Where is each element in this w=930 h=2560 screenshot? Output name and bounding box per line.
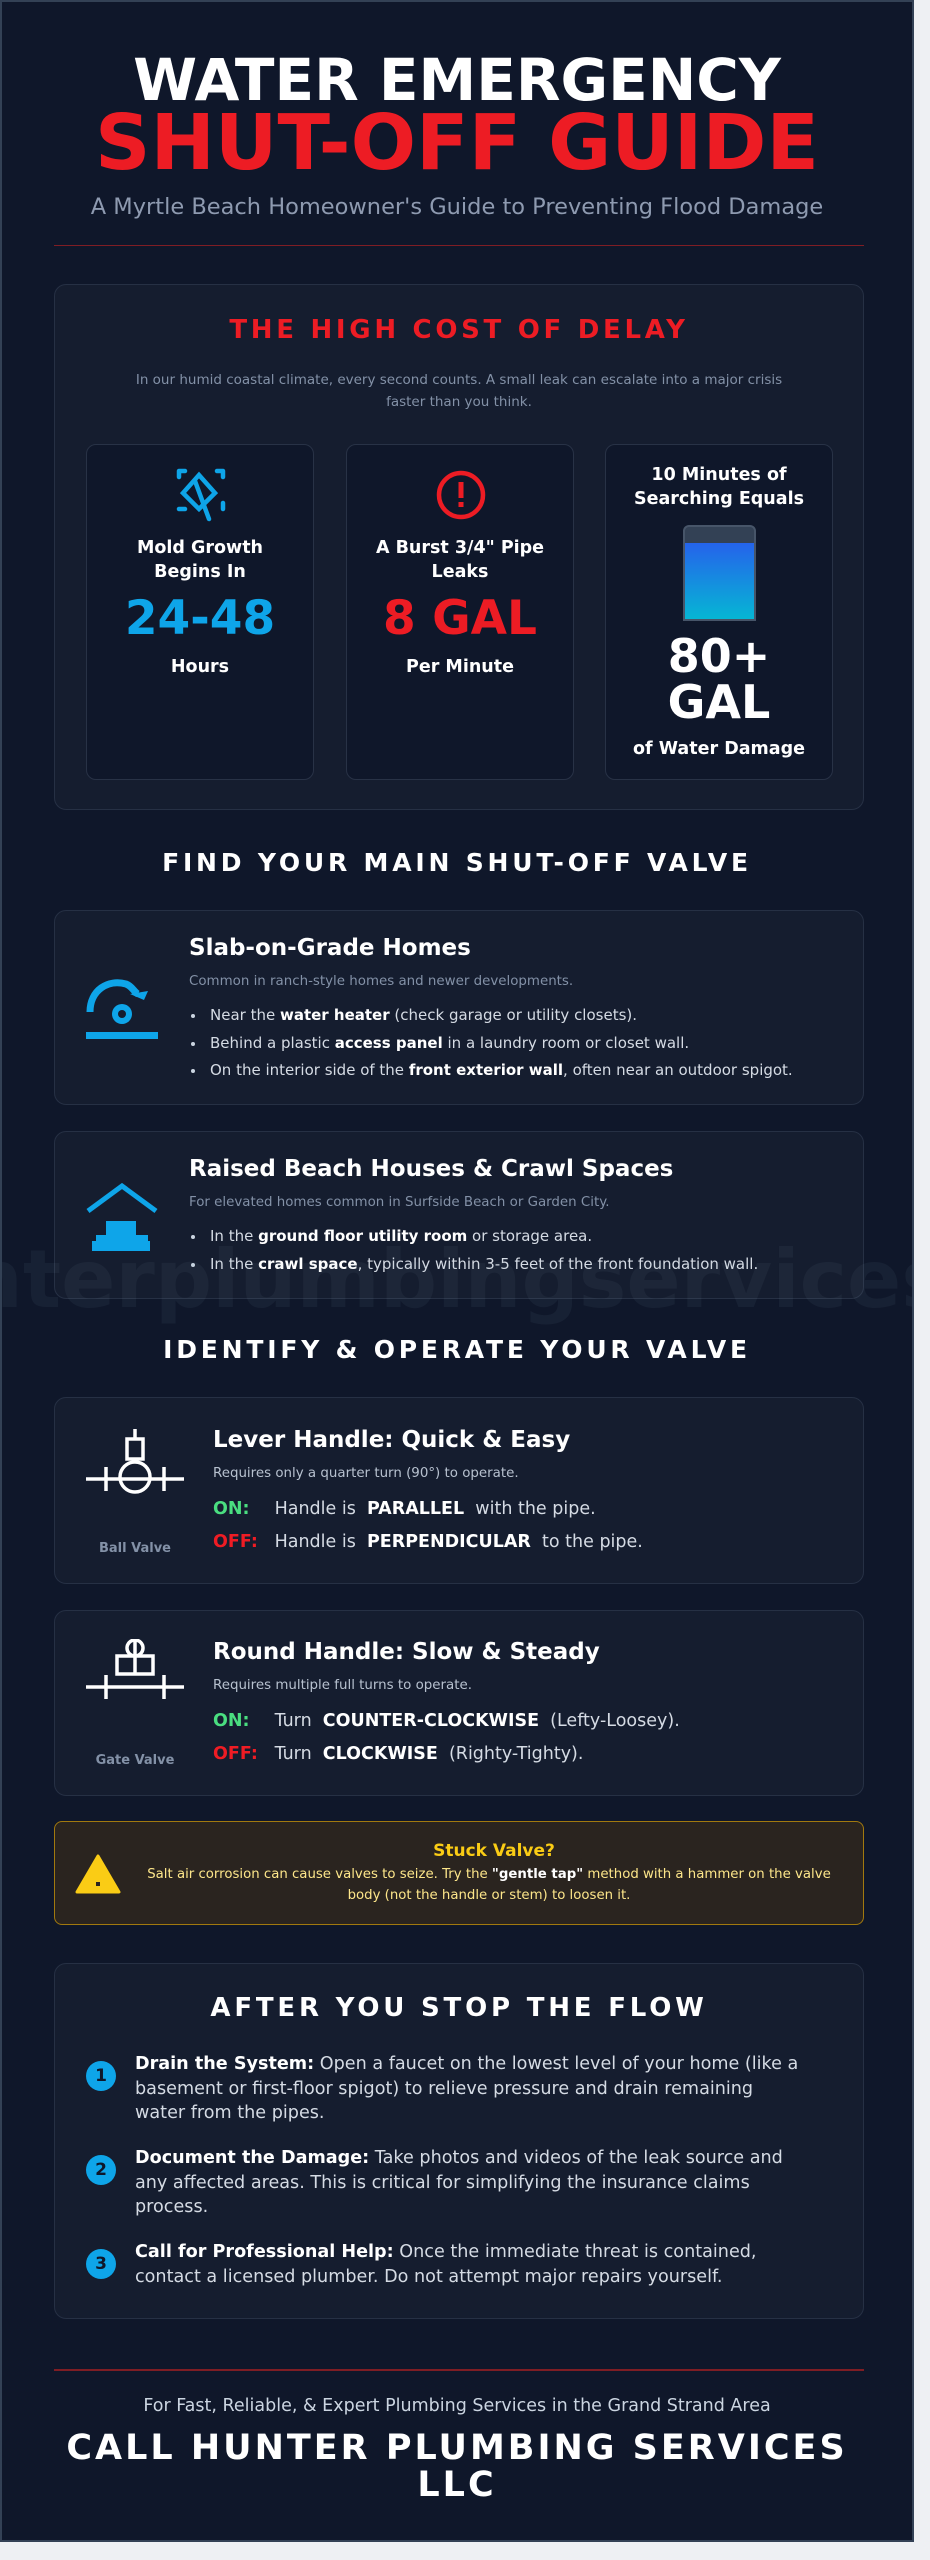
icon: water bucket xyxy=(683,525,756,621)
step 2 xyxy=(86,2148,783,2217)
card: 10 minutes: 10 Minutes of xyxy=(651,465,787,485)
card: burst pipe xyxy=(346,444,574,780)
title: WATER EMERGENCY xyxy=(133,46,781,114)
panel: slab homes: Common in ranch-style homes and newer developments. xyxy=(189,974,573,989)
icon: gate valve xyxy=(86,1639,184,1699)
panel: raised homes: For elevated homes common in Surfside Beach or Garden City. xyxy=(189,1195,610,1210)
panel: after you stop the flow: basement or first-floor spigot) to relieve pressure and drain remaining xyxy=(135,2078,753,2098)
card: burst pipe: Per Minute xyxy=(406,657,514,677)
panel: after you stop the flow: 2 xyxy=(95,2160,107,2180)
card: 10 minutes: of Water Damage xyxy=(633,739,805,759)
panel: raised homes: In the ground floor utility room or storage area. xyxy=(210,1227,592,1245)
panel: after you stop the flow: contact a licensed plumber. Do not attempt major repairs yourself. xyxy=(135,2266,722,2286)
panel: lever handle: ON: xyxy=(213,1499,250,1519)
panel: round handle: OFF: xyxy=(213,1744,258,1764)
callout: stuck valve: Stuck Valve? xyxy=(433,1841,555,1861)
icon: slab xyxy=(86,979,158,1039)
call to action: CALL HUNTER PLUMBING SERVICES LLC xyxy=(66,2428,848,2505)
heading: high cost: THE HIGH COST OF DELAY xyxy=(229,315,689,345)
card: burst pipe: A Burst 3/4" Pipe xyxy=(376,538,544,558)
heading: after: AFTER YOU STOP THE FLOW xyxy=(210,1993,708,2023)
panel: lever handle: Handle is PARALLEL with the pipe. xyxy=(275,1499,596,1519)
step 3: Call for Professional Help: Once the immediate threat is contained, xyxy=(135,2242,757,2262)
icon: ball valve xyxy=(86,1429,184,1494)
icon: raised house xyxy=(86,1183,158,1251)
panel: lever handle: Lever Handle: Quick & Easy xyxy=(213,1427,570,1453)
card: 10 minutes: 80+ xyxy=(668,629,770,683)
card: 10 minutes: Searching Equals xyxy=(634,489,804,509)
panel: round handle: ON: xyxy=(213,1711,250,1731)
title xyxy=(95,46,819,188)
card: burst pipe: Leaks xyxy=(432,562,488,582)
panel: slab homes: Behind a plastic access panel in a laundry room or closet wall. xyxy=(210,1034,689,1052)
callout: stuck valve: body (not the handle or stem) to loosen it. xyxy=(348,1888,630,1903)
icon: alert xyxy=(436,470,486,520)
panel: after you stop the flow: 1 xyxy=(95,2066,107,2086)
heading: identify valve: IDENTIFY & OPERATE YOUR VALVE xyxy=(163,1335,751,1364)
card: mold xyxy=(86,444,314,780)
card: mold: Begins In xyxy=(154,562,246,582)
panel: after you stop the flow: process. xyxy=(135,2197,208,2217)
panel: round handle: Round Handle: Slow & Steady xyxy=(213,1639,600,1665)
step 3 xyxy=(86,2242,757,2286)
heading: find valve: FIND YOUR MAIN SHUT-OFF VALVE xyxy=(162,848,752,877)
title: SHUT-OFF GUIDE xyxy=(95,99,819,188)
step 1 xyxy=(86,2054,798,2123)
panel: after you stop the flow: 3 xyxy=(95,2254,107,2274)
callout: stuck valve xyxy=(54,1821,864,1925)
card: mold: Mold Growth xyxy=(137,538,263,558)
panel: after you stop the flow: water from the pipes. xyxy=(135,2103,325,2123)
panel: round handle xyxy=(54,1610,864,1796)
panel: after you stop the flow xyxy=(54,1963,864,2319)
step 2: Document the Damage: Take photos and videos of the leak source and xyxy=(135,2148,783,2168)
panel: slab homes xyxy=(54,910,864,1105)
card: mold: Hours xyxy=(171,657,229,677)
panel: raised homes xyxy=(54,1131,864,1299)
card: 10 minutes xyxy=(605,444,833,780)
panel: lever handle: Requires only a quarter turn (90°) to operate. xyxy=(213,1466,519,1481)
intro text: In our humid coastal climate, every second counts. A small leak can escalate into a major crisis faster than you think. xyxy=(136,372,782,410)
card: mold: 24-48 xyxy=(125,591,275,646)
icon: mold xyxy=(176,468,226,522)
step 1: Drain the System: Open a faucet on the lowest level of your home (like a xyxy=(135,2054,798,2074)
panel: round handle: Turn COUNTER-CLOCKWISE (Lefty-Loosey). xyxy=(275,1711,680,1731)
icon: warning xyxy=(76,1854,121,1894)
panel: high cost of delay xyxy=(54,284,864,810)
panel: lever handle: Handle is PERPENDICULAR to the pipe. xyxy=(275,1532,643,1552)
footer text: For Fast, Reliable, & Expert Plumbing Services in the Grand Strand Area xyxy=(143,2396,771,2416)
panel: raised homes: Raised Beach Houses & Crawl Spaces xyxy=(189,1156,673,1182)
card: 10 minutes: GAL xyxy=(668,675,770,729)
card: burst pipe: 8 GAL xyxy=(383,591,537,646)
subtitle: A Myrtle Beach Homeowner's Guide to Preventing Flood Damage xyxy=(91,194,823,220)
panel: slab homes: Slab-on-Grade Homes xyxy=(189,935,471,961)
panel: slab homes: On the interior side of the front exterior wall, often near an outdoor spigot. xyxy=(210,1061,793,1079)
panel: round handle: Requires multiple full turns to operate. xyxy=(213,1678,472,1693)
panel: round handle: Turn CLOCKWISE (Righty-Tighty). xyxy=(275,1744,583,1764)
panel: after you stop the flow: any affected areas. This is critical for simplifying the insurance claims xyxy=(135,2172,750,2192)
panel: lever handle xyxy=(54,1397,864,1584)
panel: lever handle: OFF: xyxy=(213,1532,258,1552)
panel: slab homes: Near the water heater (check garage or utility closets). xyxy=(210,1006,637,1024)
panel: raised homes: In the crawl space, typically within 3-5 feet of the front foundation wall. xyxy=(210,1254,758,1272)
panel: lever handle: Ball Valve xyxy=(99,1541,171,1556)
panel: round handle: Gate Valve xyxy=(96,1753,174,1768)
callout: stuck valve: Salt air corrosion can cause valves to seize. Try the "gentle tap" method with a hammer on the valve xyxy=(147,1867,831,1882)
